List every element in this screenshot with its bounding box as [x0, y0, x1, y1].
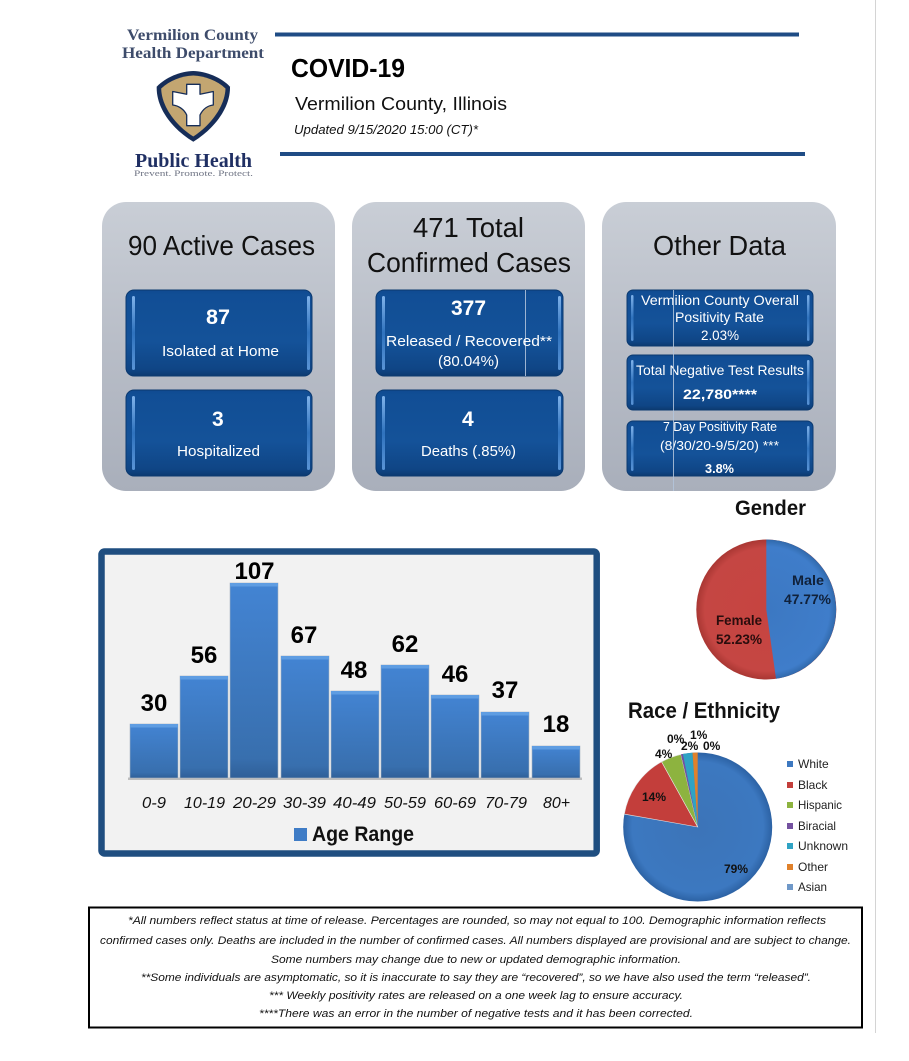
age axis labels: 70-79 — [485, 795, 527, 812]
logo wordmark: Public Health — [135, 150, 252, 172]
box: 7 day positivity rate: 3.8% — [705, 461, 734, 476]
heading: 471 total confirmed cases: Confirmed Cases — [367, 247, 571, 278]
header rule top — [275, 32, 799, 36]
bar values: 37 — [492, 677, 518, 704]
bar values: 48 — [341, 657, 367, 684]
box: overall positivity rate: Vermilion County Overall — [641, 292, 799, 308]
box: hospitalized: 3 — [212, 408, 224, 431]
box: total negative test results: 22,780**** — [683, 386, 758, 402]
updated date: Updated 9/15/2020 15:00 (CT)* — [294, 122, 479, 137]
bar values: 18 — [543, 711, 569, 738]
box: released recovered: 377 — [451, 297, 486, 320]
footnote text: Some numbers may change due to new or updated demographic information. — [271, 954, 681, 966]
footnote text — [100, 915, 851, 1020]
footnote text: *All numbers reflect status at time of release. Percentages are rounded, so may not equal to 100. Demographic information reflects — [128, 915, 827, 927]
chart: race ethnicity pie: 4% — [655, 747, 673, 761]
chart: gender pie: 52.23% — [716, 631, 763, 647]
logo: Vermilion County Health Department — [122, 27, 265, 178]
legend: race ethnicity: Unknown — [798, 839, 848, 853]
chart: race ethnicity pie: 79% — [724, 862, 748, 876]
bar values: 30 — [141, 690, 167, 717]
box: hospitalized — [126, 390, 312, 476]
chart: gender pie: Male — [792, 572, 824, 588]
panel: total confirmed cases — [352, 202, 585, 491]
heading: gender: Gender — [735, 497, 806, 520]
chart: race ethnicity pie: 0% — [703, 739, 721, 753]
bar values: 46 — [442, 661, 468, 688]
chart: race ethnicity pie: 0% — [667, 732, 685, 746]
box: isolated at home: Isolated at Home — [162, 343, 279, 360]
chart: race ethnicity pie: 14% — [642, 790, 666, 804]
panel: other data — [602, 202, 836, 491]
age axis labels: 60-69 — [434, 795, 476, 812]
box: deaths — [376, 390, 563, 476]
legend: race ethnicity: White — [798, 757, 829, 771]
age axis labels: 10-19 — [184, 795, 225, 812]
age axis labels: 0-9 — [142, 795, 166, 812]
icon: shield with cross — [157, 71, 230, 142]
box: released recovered: Released / Recovered** — [386, 333, 552, 350]
heading: 471 total confirmed cases: 471 Total — [413, 212, 524, 243]
chart: race ethnicity pie: 1% — [690, 728, 708, 742]
bar values: 62 — [392, 631, 418, 658]
age axis labels: 20-29 — [232, 795, 276, 812]
box: deaths: 4 — [462, 408, 474, 431]
heading: other data: Other Data — [653, 230, 786, 261]
header rule bottom — [280, 152, 805, 156]
footnote text: **Some individuals are asymptomatic, so it is inaccurate to say they are “recovered”, so we have also used the term “released”. — [141, 972, 811, 984]
legend: race ethnicity: Hispanic — [798, 798, 842, 812]
box: 7 day positivity rate: (8/30/20-9/5/20) *** — [660, 438, 779, 453]
legend: race ethnicity — [787, 757, 848, 894]
chart: race ethnicity pie — [623, 728, 772, 902]
logo wordmark: Prevent. Promote. Protect. — [134, 169, 253, 178]
legend: race ethnicity: Other — [798, 860, 828, 874]
heading: 471 total confirmed cases — [367, 212, 571, 278]
chart: gender pie: Female — [716, 612, 762, 628]
age axis labels: 50-59 — [384, 795, 426, 812]
subtitle: Vermilion County, Illinois — [295, 93, 507, 114]
logo heading — [122, 27, 265, 62]
chart: age range bar chart — [102, 552, 597, 854]
legend: race ethnicity: Asian — [798, 880, 827, 894]
box: overall positivity rate — [627, 290, 813, 346]
age axis labels: 30-39 — [283, 795, 326, 812]
bars — [130, 583, 580, 778]
bar values — [141, 558, 569, 738]
heading: 90 active cases: 90 Active Cases — [128, 230, 315, 261]
age axis labels: 80+ — [543, 795, 570, 812]
heading: race / ethnicity: Race / Ethnicity — [628, 698, 781, 723]
chart: gender pie: 47.77% — [784, 591, 832, 607]
box: total negative test results — [627, 355, 813, 410]
box: 7 day positivity rate: 7 Day Positivity Rate — [663, 419, 777, 434]
legend: race ethnicity: Biracial — [798, 819, 836, 833]
bar values: 107 — [234, 558, 275, 585]
age axis labels: 40-49 — [333, 795, 376, 812]
title: COVID-19 — [291, 53, 405, 83]
chart: race ethnicity pie: 2% — [681, 739, 699, 753]
bar values: 67 — [291, 622, 317, 649]
logo heading: Vermilion County — [127, 27, 258, 44]
box: isolated at home — [126, 290, 312, 376]
logo heading: Health Department — [122, 45, 265, 62]
box: total negative test results: Total Negative Test Results — [636, 362, 804, 378]
box: isolated at home: 87 — [206, 306, 230, 329]
footnotes box — [89, 908, 862, 1028]
bar values: 56 — [191, 642, 217, 669]
box: released recovered: (80.04%) — [438, 353, 499, 370]
page edge line — [875, 0, 876, 1033]
axis baseline — [128, 778, 582, 780]
chart: gender pie — [696, 540, 836, 680]
box: 7 day positivity rate — [627, 419, 813, 476]
box: deaths: Deaths (.85%) — [421, 443, 516, 460]
box: hospitalized: Hospitalized — [177, 443, 260, 460]
age axis labels — [142, 795, 570, 812]
footnote text: *** Weekly positivity rates are released on a one week lag to ensure accuracy. — [269, 990, 683, 1002]
panel: active cases — [102, 202, 335, 491]
footnote text: ****There was an error in the number of negative tests and it has been corrected. — [259, 1008, 693, 1020]
footnote text: confirmed cases only. Deaths are included in the number of confirmed cases. All numbers displayed are provisional and are subject to change. — [100, 935, 851, 947]
bar top highlights — [130, 583, 580, 750]
legend: race ethnicity: Black — [798, 778, 828, 792]
box: overall positivity rate: Positivity Rate — [675, 309, 764, 325]
chart legend: age range: Age Range — [312, 823, 414, 846]
box: released recovered — [376, 290, 563, 376]
box: overall positivity rate: 2.03% — [701, 327, 739, 343]
